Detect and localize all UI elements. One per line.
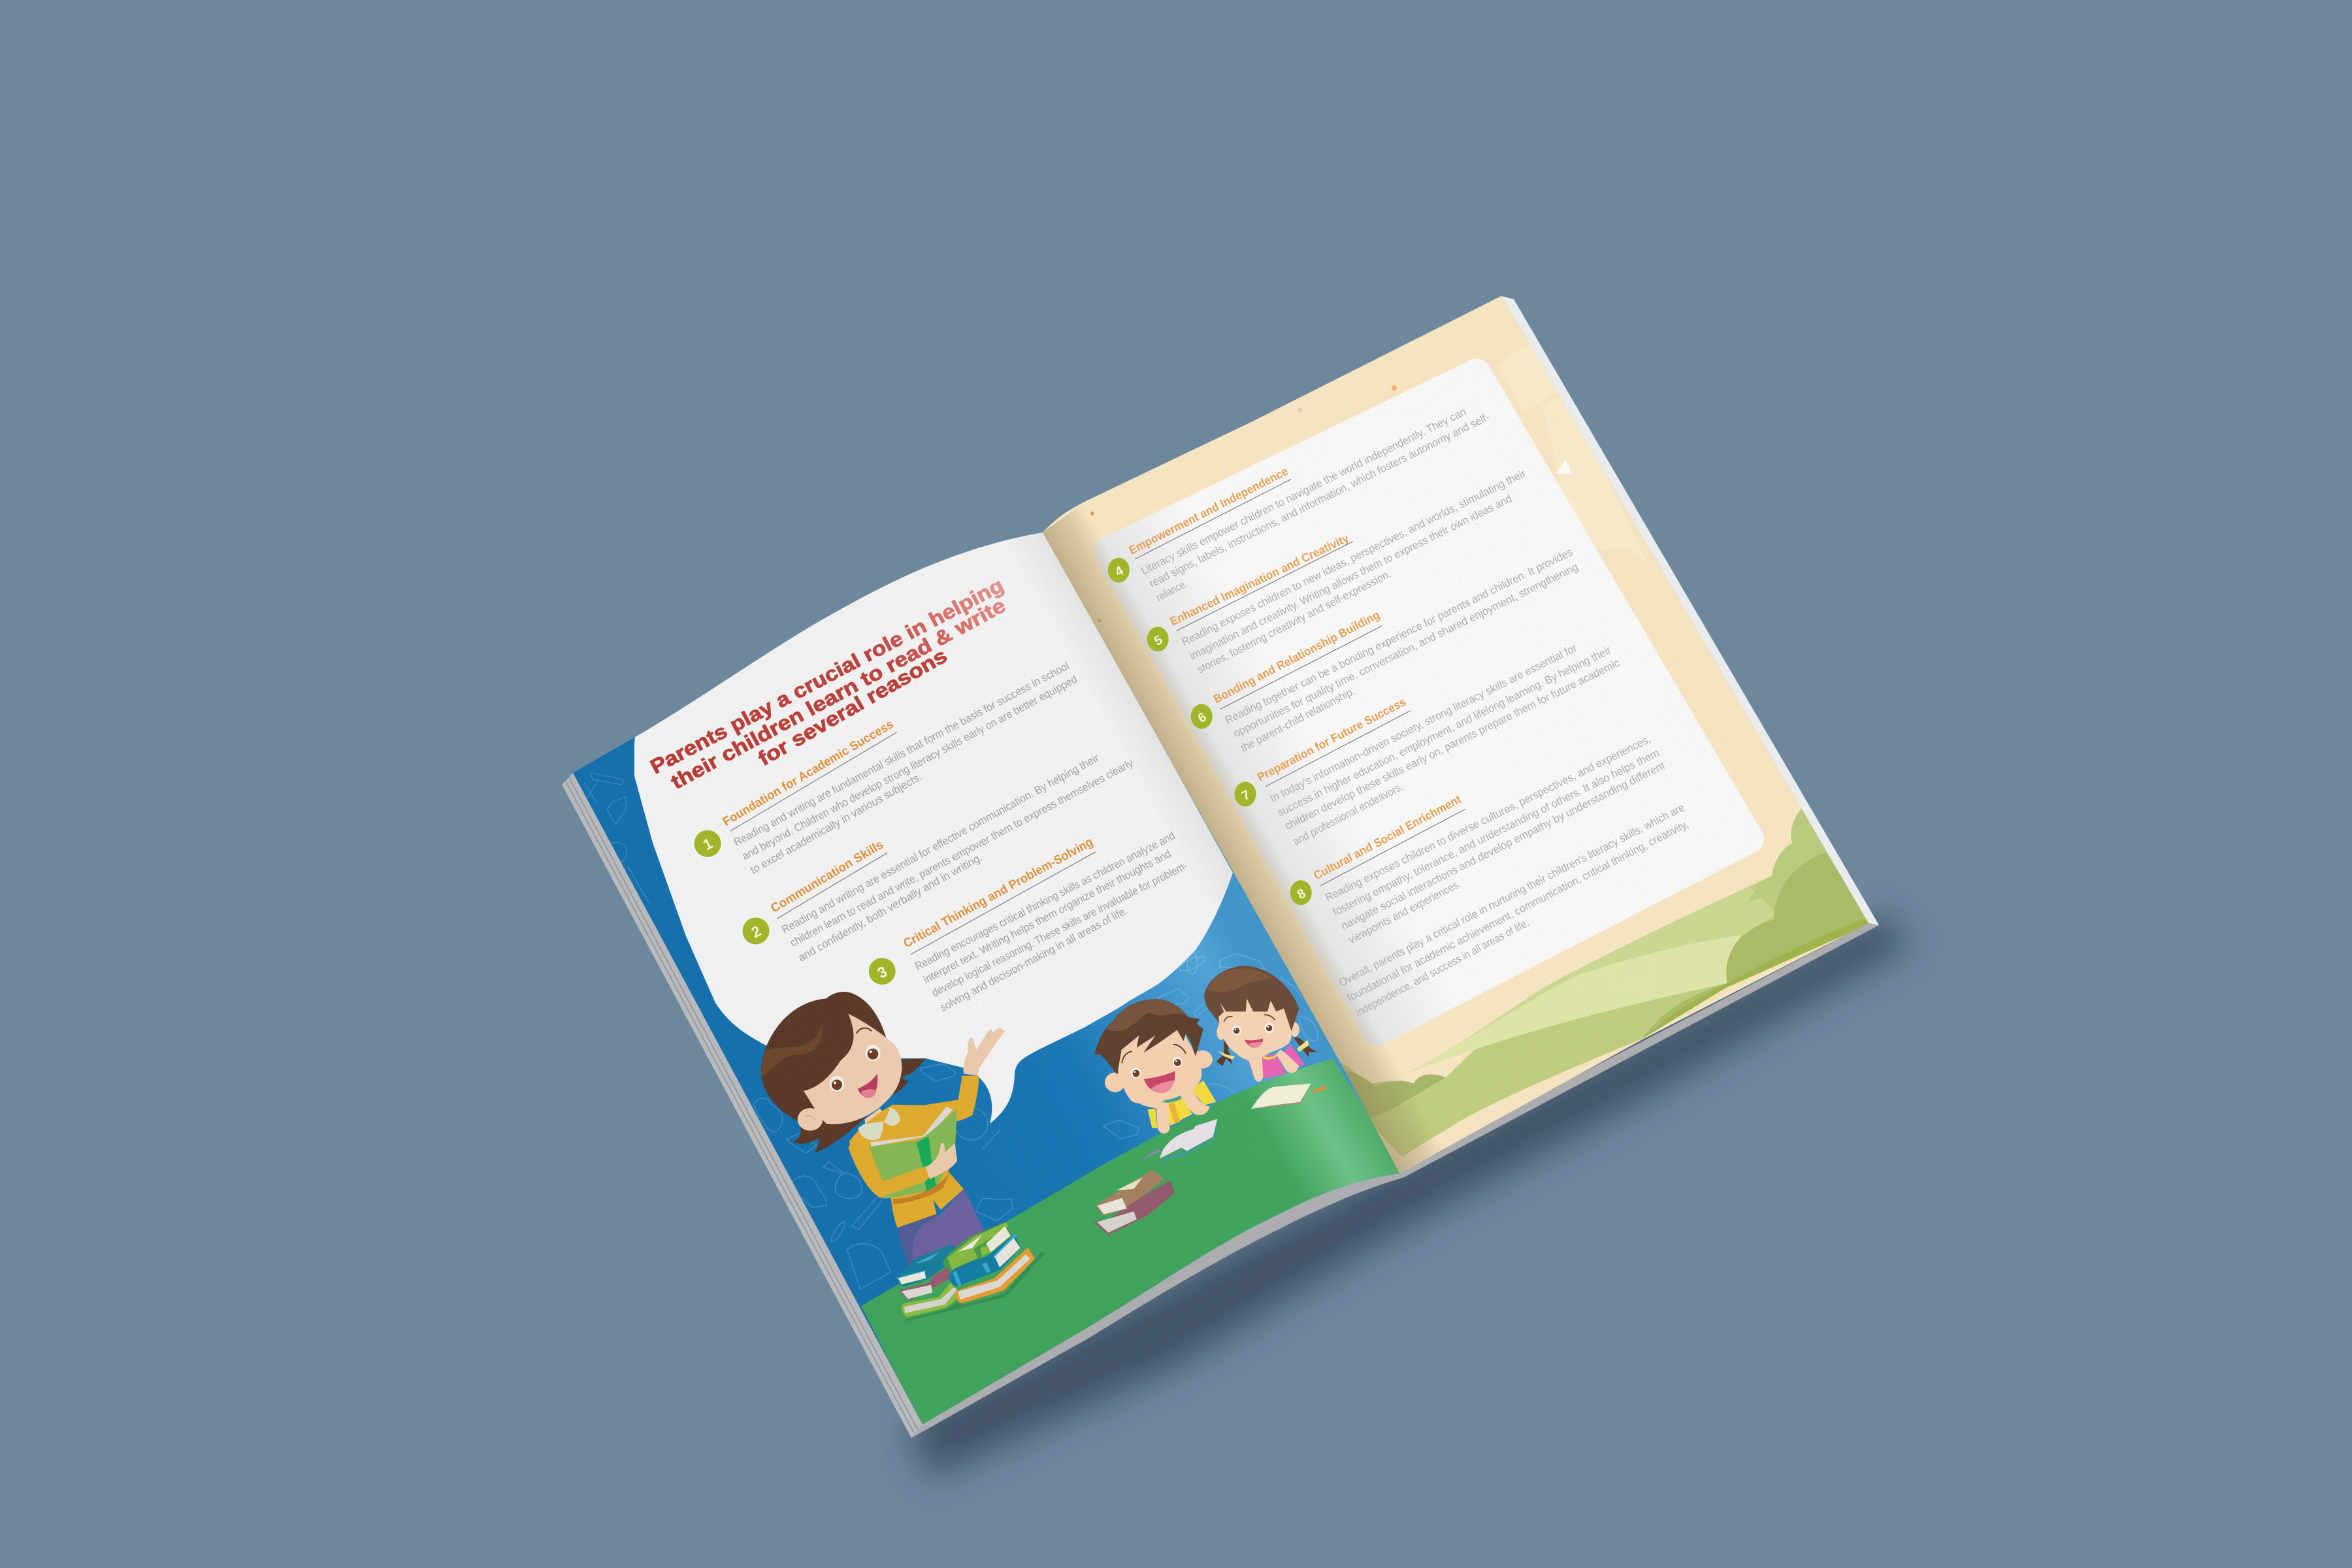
page stack edges <box>562 296 1879 1438</box>
section 4: empowerment and independence: Literacy skills empower children to navigate the world independently. They can <box>1139 405 1468 577</box>
section 8: cultural and social enrichment: fostering empathy, tolerance, and understanding of others. It also helps them <box>1331 747 1661 919</box>
section 3: critical thinking and problem-solving: Critical Thinking and Problem-Solving <box>901 835 1096 951</box>
section 4: empowerment and independence: Empowerment and Independence <box>1127 465 1290 557</box>
section 3: critical thinking and problem-solving: Reading encourages critical thinking skills as children analyze and <box>913 829 1177 973</box>
section 3: critical thinking and problem-solving: develop logical reasoning. These skills are invaluable for problem- <box>930 859 1190 999</box>
closing paragraph: independence, and success in all areas of life. <box>1354 917 1531 1019</box>
book stack in front of mother <box>895 1222 1045 1321</box>
title: their children learn to read & write <box>667 594 1009 794</box>
section 2: communication skills: Reading and writing are essential for effective communication. By helping their <box>779 751 1101 936</box>
section 5: enhanced imagination and creativity: Reading exposes children to new ideas, perspectives, and worlds, stimulating their <box>1180 467 1527 648</box>
section 8: cultural and social enrichment: viewpoints and experiences. <box>1347 877 1463 946</box>
figure: girl with pigtails <box>1204 966 1316 1082</box>
decorative dots and triangle <box>1090 385 1572 622</box>
section 7: preparation for future success: and professional endeavors. <box>1291 780 1405 848</box>
section 6: bonding and relationship building: Bonding and Relationship Building <box>1211 608 1382 706</box>
section 5: enhanced imagination and creativity: imagination and creativity. Writing allows them to express their own ideas and <box>1188 492 1514 662</box>
figure: mother reading a book <box>761 992 1005 1267</box>
title: for several reasons <box>755 644 951 770</box>
closing paragraph: foundational for academic achievement, communication, critical thinking, creativity, <box>1345 818 1690 1004</box>
panel: right page white text card <box>1108 373 1750 1032</box>
section 3: critical thinking and problem-solving <box>869 829 1190 1014</box>
section 7: preparation for future success: 7 <box>1239 787 1252 804</box>
green ground <box>861 1058 1411 1437</box>
section 2: communication skills: and confidently, both verbally and in writing. <box>796 851 985 964</box>
doodle outlines upper left <box>584 773 649 903</box>
section 2: communication skills: Communication Skills <box>768 838 886 916</box>
decorative pale clouds <box>1499 343 1646 562</box>
section 1: foundation for academic success: Foundation for Academic Success <box>721 717 896 829</box>
doodle outlines right side: atom, book, ruler, cloud <box>1103 953 1318 1139</box>
figure: boy leaning on hands <box>1094 999 1217 1134</box>
book stack on the ground <box>1094 1169 1175 1235</box>
section 1: foundation for academic success: to excel academically in various subjects. <box>748 770 924 876</box>
section 1: foundation for academic success: and beyond. Children who develop strong literacy skills early on are better equipped <box>740 673 1079 862</box>
section 6: bonding and relationship building: 6 <box>1196 710 1209 726</box>
section 3: critical thinking and problem-solving: 3 <box>874 962 890 981</box>
section 4: empowerment and independence: reliance. <box>1154 577 1189 604</box>
section 8: cultural and social enrichment: Reading exposes children to diverse cultures, perspectives, and experiences, <box>1323 733 1653 904</box>
title: Parents play a crucial role in helping <box>647 574 1007 778</box>
section 6: bonding and relationship building: Reading together can be a bonding experience for parents and children. It provides <box>1223 546 1575 727</box>
section 5: enhanced imagination and creativity: 5 <box>1152 632 1165 649</box>
section 8: cultural and social enrichment: Cultural and Social Enrichment <box>1311 792 1463 882</box>
closing paragraph: Overall, parents play a critical role in nurturing their children's literacy skills, which are <box>1337 801 1686 989</box>
doodle outlines lower left: bulb, flask, ruler, clip, book, globe <box>753 1064 1013 1289</box>
section 4: empowerment and independence: read signs, labels, instructions, and information, which fosters autonomy and self- <box>1147 410 1492 590</box>
panel: right page <box>1043 296 1874 1173</box>
section 4: empowerment and independence: 4 <box>1113 563 1126 580</box>
panel: left page <box>555 523 1437 1450</box>
section 6: bonding and relationship building: opportunities for quality time, conversation, and shared enjoyment, strengthening <box>1232 561 1580 740</box>
gutter shading on right page <box>1043 500 1445 1173</box>
section 1: foundation for academic success: 1 <box>700 834 715 853</box>
section 7: preparation for future success: success in higher education, employment, and lifelong learning. By helping their <box>1275 644 1613 819</box>
section 2: communication skills: children learn to read and write, parents empower them to express themselves clearly <box>788 757 1135 949</box>
section 5: enhanced imagination and creativity: Enhanced Imagination and Creativity <box>1168 531 1351 629</box>
section 1: foundation for academic success: Reading and writing are fundamental skills that form the basis for success in school <box>732 659 1071 849</box>
section 7: preparation for future success: children develop these skills early on, parents prepare them for future academic <box>1283 657 1622 832</box>
section 7: preparation for future success: Preparation for Future Success <box>1255 695 1408 784</box>
mockup scene: open booklet on blue-grey background <box>562 296 1915 1486</box>
book shadow <box>911 915 1911 1478</box>
open books and pencils on the grass <box>1140 1083 1327 1161</box>
section 3: critical thinking and problem-solving: interpret text. Writing helps them organize their thoughts and <box>921 847 1173 986</box>
blue sky background <box>555 523 1437 1450</box>
landscape: green hills and bushes <box>1339 808 1874 1157</box>
section 8: cultural and social enrichment: 8 <box>1295 886 1308 902</box>
section 3: critical thinking and problem-solving: solving and decision-making in all areas of life. <box>938 904 1130 1014</box>
section 7: preparation for future success: In today's information-driven society, strong literacy skills are essential for <box>1268 642 1579 805</box>
section 2: communication skills: 2 <box>748 922 764 941</box>
white speech bubble <box>634 523 1233 1124</box>
section 5: enhanced imagination and creativity: stories, fostering creativity and self-expression. <box>1195 568 1393 676</box>
paper grain <box>562 294 1882 1444</box>
section 6: bonding and relationship building: the parent-child relationship. <box>1239 685 1357 755</box>
section 8: cultural and social enrichment: navigate social interactions and develop empathy by understanding different <box>1339 759 1667 932</box>
